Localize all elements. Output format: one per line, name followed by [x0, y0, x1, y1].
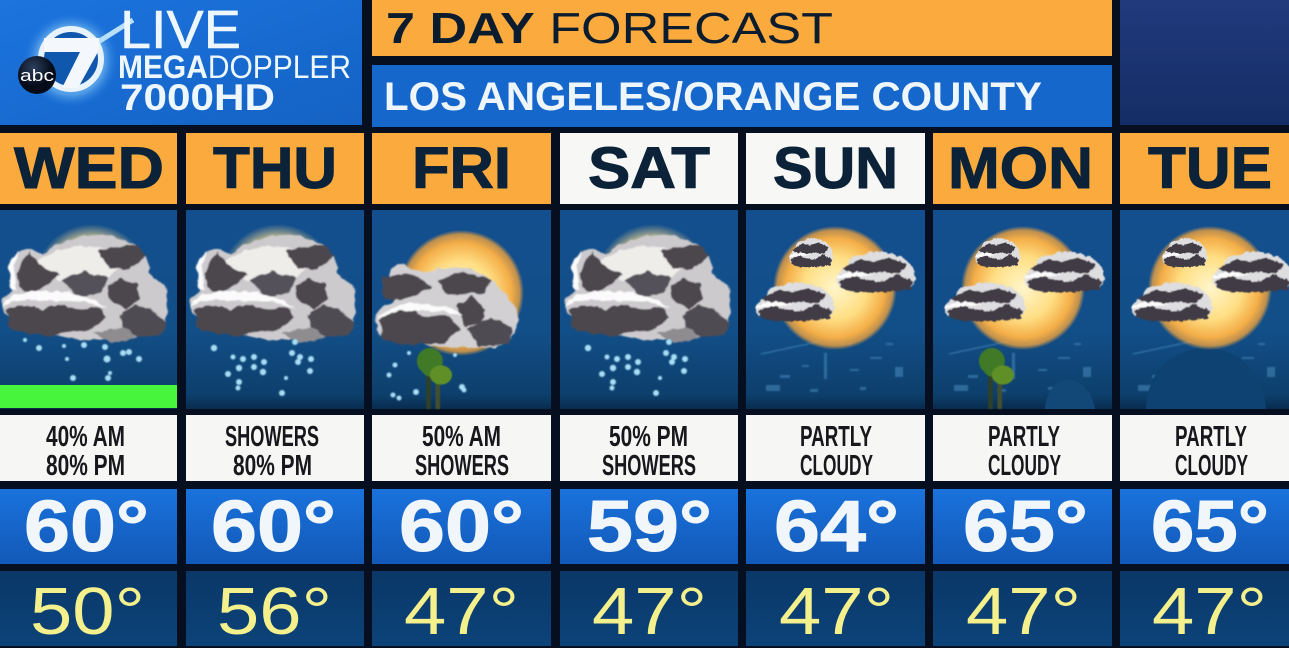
logo text: LIVE: LIVE — [120, 0, 241, 60]
day column: Thursday — [186, 133, 364, 648]
day header: TUE — [1120, 133, 1289, 204]
condition: PARTLY CLOUDY — [933, 415, 1112, 482]
icon: abc 7 logo — [18, 12, 133, 108]
day column: Sunday — [746, 133, 925, 648]
day header: SUN — [746, 133, 925, 204]
day header: MON — [933, 133, 1112, 204]
station logo panel — [0, 0, 362, 125]
condition: 50% AM SHOWERS: 50% AM — [422, 421, 501, 453]
condition: PARTLY CLOUDY: PARTLY — [988, 421, 1060, 453]
condition: PARTLY CLOUDY — [746, 415, 925, 482]
low temperature: 47: 47° — [1152, 574, 1267, 648]
weather image: clouds and rain — [186, 210, 364, 409]
icon: abc 7 logo: abc — [20, 66, 55, 85]
day header: MON: MON — [948, 136, 1093, 201]
condition: PARTLY CLOUDY: CLOUDY — [800, 450, 873, 482]
weather image: clouds and rain — [0, 210, 177, 409]
high temperature: 59: 59° — [587, 487, 712, 567]
location heading: LOS ANGELES/ORANGE COUNTY — [384, 75, 1042, 119]
low temperature: 47 — [746, 571, 925, 648]
logo text: 7000HD: 7000HD — [120, 77, 275, 118]
low temperature: 50: 50° — [30, 574, 145, 648]
day header: WED — [0, 133, 177, 204]
weather image: sun, clouds and hill — [1120, 210, 1289, 409]
top right panel — [1120, 0, 1289, 125]
condition: 40% AM 80% PM: 40% AM — [46, 421, 125, 453]
day header: SUN: SUN — [773, 136, 898, 201]
high temperature: 64 — [746, 487, 925, 567]
day header: THU — [186, 133, 364, 204]
condition: 40% AM 80% PM: 80% PM — [46, 450, 125, 482]
low temperature: 56 — [186, 571, 364, 648]
condition: SHOWERS 80% PM: SHOWERS — [225, 421, 319, 453]
high temperature: 60: 60° — [399, 487, 524, 567]
low temperature: 47 — [933, 571, 1112, 648]
condition: 40% AM 80% PM — [0, 415, 177, 482]
weather image: sun and clouds — [746, 210, 925, 409]
condition: 50% PM SHOWERS — [560, 415, 738, 482]
day header: THU: THU — [213, 136, 337, 201]
title bar — [372, 0, 1112, 56]
low temperature: 47 — [1120, 571, 1289, 648]
condition: SHOWERS 80% PM — [186, 415, 364, 482]
low temperature: 47: 47° — [592, 574, 707, 648]
title: 7 DAY FORECAST — [386, 4, 833, 53]
day header: FRI — [372, 133, 551, 204]
condition: PARTLY CLOUDY: CLOUDY — [988, 450, 1061, 482]
green bar — [0, 385, 177, 408]
condition: SHOWERS 80% PM: 80% PM — [233, 450, 312, 482]
weather image: sun, clouds and tree — [933, 210, 1112, 409]
high temperature: 65: 65° — [963, 487, 1088, 567]
weather image: clouds and rain — [560, 210, 738, 409]
day header: SAT: SAT — [588, 136, 710, 201]
day header: SAT — [560, 133, 738, 204]
weather image: sun, cloud, rain and tree — [372, 210, 551, 409]
high temperature: 64: 64° — [774, 487, 899, 567]
high temperature: 60 — [0, 487, 177, 567]
high temperature: 65 — [1120, 487, 1289, 567]
day column: Tuesday — [1120, 133, 1289, 648]
condition: 50% AM SHOWERS — [372, 415, 551, 482]
low temperature: 47: 47° — [966, 574, 1081, 648]
low temperature: 47: 47° — [779, 574, 894, 648]
high temperature: 60 — [372, 487, 551, 567]
low temperature: 50 — [0, 571, 177, 648]
day column: Wednesday — [0, 133, 177, 648]
high temperature: 60: 60° — [211, 487, 336, 567]
day column: Monday — [933, 133, 1112, 648]
condition: 50% PM SHOWERS: 50% PM — [609, 421, 688, 453]
condition: PARTLY CLOUDY: PARTLY — [800, 421, 872, 453]
high temperature: 65 — [933, 487, 1112, 567]
high temperature: 60 — [186, 487, 364, 567]
high temperature: 59 — [560, 487, 738, 567]
logo text: MEGADOPPLER: MEGADOPPLER — [118, 49, 351, 85]
day column: Saturday — [560, 133, 738, 648]
low temperature: 47 — [560, 571, 738, 648]
location bar — [372, 65, 1112, 127]
high temperature: 60: 60° — [24, 487, 149, 567]
condition: 50% AM SHOWERS: SHOWERS — [415, 450, 509, 482]
low temperature: 47: 47° — [404, 574, 519, 648]
day header: WED: WED — [14, 136, 164, 201]
low temperature: 56: 56° — [217, 574, 332, 648]
day column: Friday — [372, 133, 551, 648]
high temperature: 65: 65° — [1151, 487, 1269, 567]
condition: PARTLY CLOUDY: PARTLY — [1175, 421, 1247, 453]
low temperature: 47 — [372, 571, 551, 648]
condition: 50% PM SHOWERS: SHOWERS — [602, 450, 696, 482]
day header: TUE: TUE — [1148, 136, 1272, 201]
day header: FRI: FRI — [412, 136, 511, 201]
condition: PARTLY CLOUDY — [1120, 415, 1289, 482]
